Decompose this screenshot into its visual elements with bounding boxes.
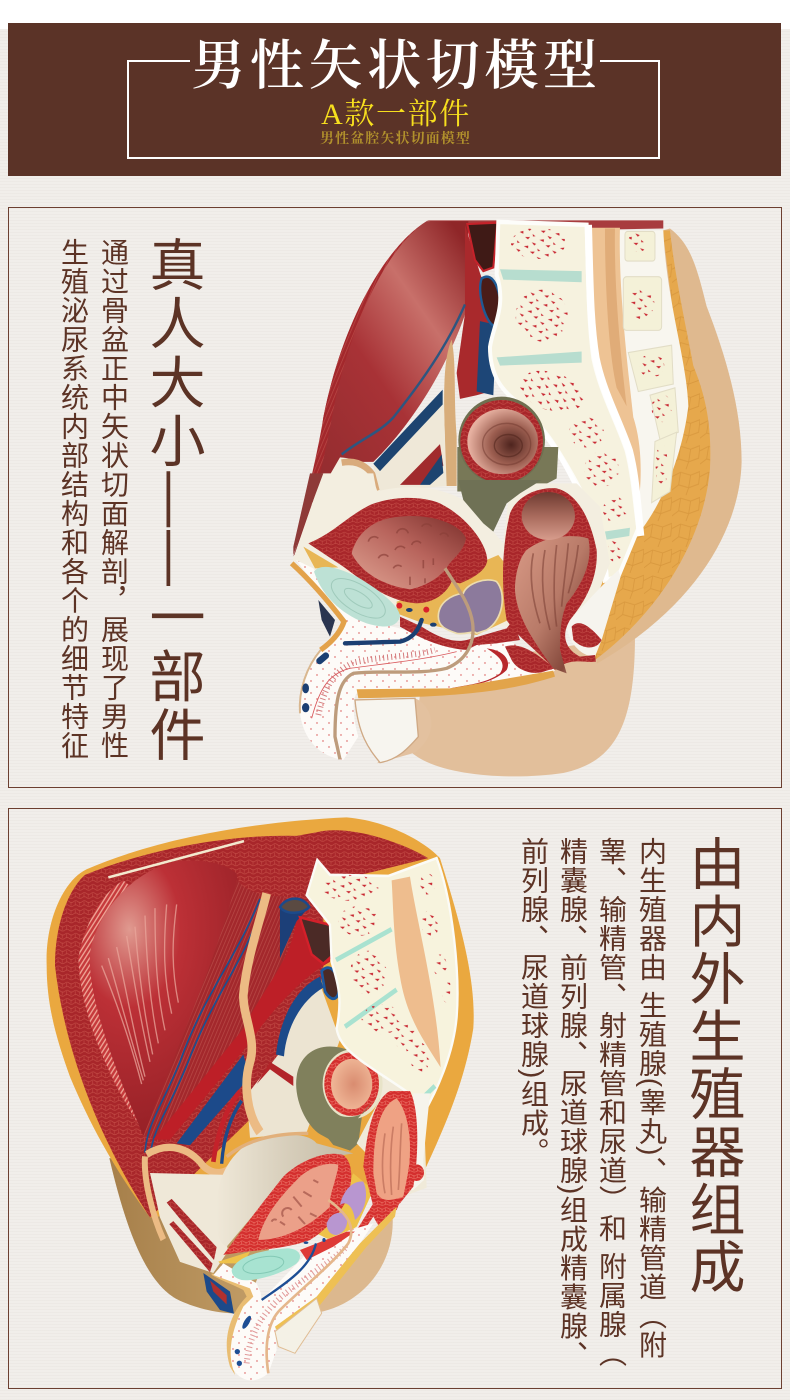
pedestal: [412, 636, 635, 776]
lower rectal lumen: [515, 536, 590, 673]
panel: life size model: [8, 207, 782, 788]
tube over wall: [145, 1156, 163, 1240]
iliac artery: [400, 444, 443, 485]
iliac vein upper: [276, 977, 323, 1056]
top band: [427, 220, 663, 232]
pale tendon line: [108, 841, 244, 877]
white anal tissue: [567, 570, 621, 657]
ribbed muscle edge: [297, 221, 427, 543]
text block: organ composition: [518, 837, 667, 1369]
psoas strip: [457, 225, 497, 399]
illustration: interior view pelvic model: [47, 817, 474, 1380]
abdominal muscle: [293, 221, 468, 556]
text block: organ composition: 精囊腺、前列腺、尿道球腺)组成精囊腺、: [557, 837, 588, 1369]
vein opening: [480, 277, 502, 326]
orange skin strip: [275, 1207, 397, 1332]
symphysis: [314, 567, 400, 626]
text column: structural details: 生殖泌尿系统内部结构和各个的细节特征: [58, 238, 89, 760]
rectal folds: [382, 1123, 402, 1195]
ejaculatory tract: [267, 1200, 351, 1373]
illustration: side view pelvic model: [292, 220, 742, 776]
bone speckles: [511, 228, 627, 562]
pale sacral fill: [357, 1054, 427, 1195]
penile section: [213, 1223, 373, 1380]
blue vessel chain: [145, 899, 263, 1153]
anterior wall: [150, 1173, 228, 1273]
rectum ring: [457, 397, 558, 492]
spinous blocks: [623, 231, 678, 503]
text block: organ composition: 睾、输精管、射精管和尿道）和 附属腺（: [596, 837, 627, 1368]
main title: 男性矢状切模型: [191, 23, 602, 100]
yellow fat: [397, 555, 508, 635]
scrotum: [355, 698, 418, 763]
muscle cell wall: [55, 830, 428, 1217]
vertebral column: [307, 858, 457, 1114]
olive tube base: [307, 1100, 373, 1150]
scrotum: [275, 1298, 322, 1353]
small caption: 男性盆腔矢状切面模型: [320, 132, 471, 147]
wedge tube: [342, 462, 380, 490]
muscle stubs: [293, 473, 323, 555]
blue marks: [235, 1238, 326, 1366]
bladder dimples: [272, 1180, 318, 1225]
bladder wall: [223, 1154, 351, 1255]
artery opening: [467, 223, 497, 271]
vessel marks: [302, 608, 437, 712]
bladder lumen: [258, 1164, 338, 1240]
pale fossa: [373, 391, 447, 492]
vessels under base: [203, 1273, 234, 1314]
urethral markings: [318, 650, 435, 715]
vena cava opening: [280, 899, 309, 913]
vein trunk: [477, 321, 497, 395]
cream wedge: [312, 457, 383, 506]
ureter strip: [444, 340, 457, 486]
bladder lumen: [352, 516, 466, 589]
vertebral column: [490, 222, 638, 580]
rear sacrum: [617, 230, 688, 540]
anal muscle: [409, 1164, 424, 1181]
skin lump: [377, 698, 431, 763]
symphysis: [232, 1248, 300, 1280]
spongy red band: [450, 648, 508, 688]
spinous speckles: [628, 231, 672, 488]
bladder dome: [216, 1135, 353, 1247]
iliac veins: [373, 390, 443, 471]
rectum tube: [296, 1046, 363, 1151]
olive rectal tube: [458, 480, 542, 532]
upper rectal lumen: [522, 492, 575, 540]
frame gap behind the title: [190, 53, 600, 73]
white penile section: [296, 560, 555, 760]
ribbed edge: [78, 880, 150, 1134]
pale pelvic cavity: [247, 984, 340, 1138]
iliac vein lower: [177, 1054, 250, 1145]
lower pelvic section: [212, 1091, 430, 1380]
bladder wall: [308, 498, 487, 603]
panel: reproductive organs: [8, 808, 782, 1389]
heading: internal and external organs: 由内外生殖器组成: [682, 835, 745, 1296]
ejaculatory tract: [335, 568, 473, 759]
tan tube: [243, 893, 267, 1132]
back shell: [597, 229, 742, 664]
urethral muscle: [400, 617, 520, 650]
fat outer layer: [47, 817, 474, 1217]
small artery branch: [213, 1092, 240, 1162]
header frame: [127, 60, 660, 159]
muscle fibres: [102, 904, 178, 1084]
rectum lumen: [373, 1098, 410, 1200]
text block: organ composition: 内生殖器由 生殖腺(睾丸)、输精管道（附: [636, 837, 667, 1359]
intervertebral discs: [336, 929, 435, 1099]
text block: organ composition: 前列腺、尿道球腺)组成。: [518, 837, 549, 1166]
anal muscle: [572, 623, 602, 647]
lower pelvic section: [292, 473, 621, 763]
rectum wall: [363, 1091, 417, 1207]
blue vessel band on muscle: [342, 304, 465, 454]
urethral markings: [247, 1247, 347, 1363]
spinal canal: [590, 228, 641, 511]
prostate: [327, 1181, 366, 1235]
orange skin strip: [357, 671, 555, 698]
subtitle: A款一部件: [321, 98, 471, 131]
text column: sagittal section description: 通过骨盆正中矢状切面解剖，展现了男性: [98, 238, 129, 760]
cut muscle bands: [167, 1199, 217, 1272]
bulb muscle: [505, 645, 555, 673]
heading: life size one part: 真人大小——一部件: [142, 236, 205, 765]
header banner: [8, 23, 781, 176]
concave muscle: [90, 861, 270, 1136]
bulb region: [357, 1202, 400, 1232]
aorta opening: [300, 917, 332, 964]
iliac artery: [153, 917, 332, 1140]
rectum wall: [503, 488, 597, 670]
left skin: [212, 1273, 260, 1375]
pale anterior wall: [293, 473, 610, 627]
dark recess: [318, 600, 335, 637]
skin edge: [292, 563, 344, 650]
rectum ring: [323, 1049, 383, 1119]
vein opening: [322, 968, 339, 999]
fat layer: [580, 230, 710, 660]
dark base: [109, 1158, 297, 1314]
white ligament band: [588, 225, 641, 536]
intervertebral discs: [497, 269, 630, 540]
rectal folds: [531, 543, 578, 630]
urethral muscle: [300, 1232, 355, 1260]
psoas muscle: [143, 880, 293, 1140]
prostate: [438, 580, 502, 634]
dorsal vein: [345, 620, 422, 643]
bone speckles: [322, 873, 452, 1074]
white anal tissue: [404, 1093, 430, 1190]
pedestal: [313, 1217, 393, 1313]
vena cava trunk: [280, 907, 309, 958]
muscle top section: [237, 853, 323, 896]
spinal canal: [392, 877, 441, 1067]
bladder dimples: [368, 524, 448, 585]
yellow fat: [218, 1252, 250, 1263]
dorsal vein: [262, 1243, 316, 1300]
